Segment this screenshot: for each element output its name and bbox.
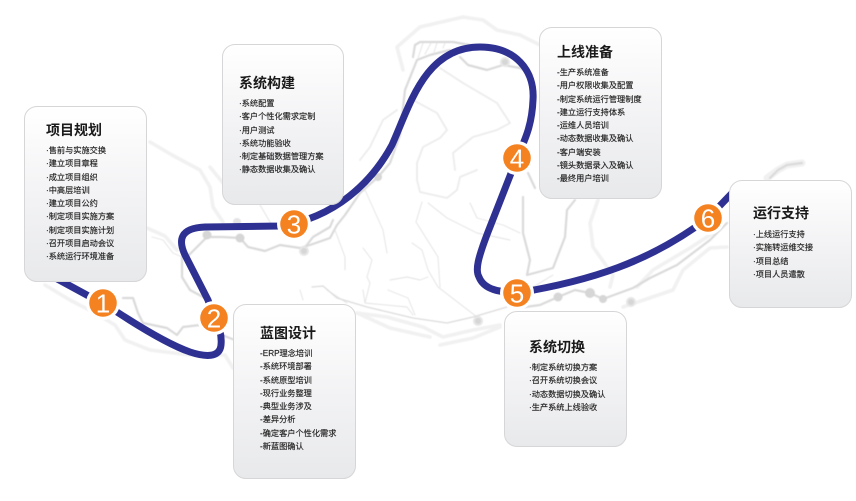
badge 5 (500, 276, 534, 310)
background river map (45, 17, 802, 368)
badge 3 (277, 207, 311, 241)
task list: -运维人员培训 (557, 121, 609, 130)
heading: 上线准备 (557, 44, 613, 60)
task list: ·制定基础数据管理方案 (239, 152, 324, 161)
panel: 上线准备 (539, 27, 662, 199)
panel: 运行支持 (729, 180, 852, 308)
task list (529, 362, 606, 412)
task list: ·中高层培训 (46, 186, 90, 195)
task list: -用户权限收集及配置 (557, 81, 633, 90)
badge 5: 5 (510, 278, 524, 308)
task list: ·上线运行支持 (753, 230, 805, 239)
panel: 系统构建 (222, 44, 344, 205)
heading: 运行支持 (753, 205, 809, 221)
task list: ·制定系统切换方案 (529, 363, 597, 372)
task list: ·项目人员遣散 (753, 270, 805, 279)
task list: ·静态数据收集及确认 (239, 165, 315, 174)
task list: ·召开项目启动会议 (46, 239, 114, 248)
task list: ·系统功能验收 (239, 139, 291, 148)
panel: 蓝图设计 (233, 304, 356, 479)
task list: ·成立项目组织 (46, 173, 98, 182)
task list: ·用户测试 (239, 126, 274, 135)
task list: ·系统配置 (239, 99, 274, 108)
task list: ·售前与实施交换 (46, 146, 106, 155)
task list: ·制定项目实施方案 (46, 212, 114, 221)
task list: -最终用户培训 (557, 174, 609, 183)
task list: ·实施转运维交接 (753, 243, 813, 252)
route line (50, 47, 735, 355)
task list: -生产系统准备 (557, 68, 609, 77)
task list: ·生产系统上线验收 (529, 403, 597, 412)
task list: ·动态数据切换及确认 (529, 390, 605, 399)
heading: 项目规划 (46, 122, 102, 138)
task list (239, 99, 324, 174)
task list: -建立运行支持体系 (557, 108, 625, 117)
badge 1: 1 (96, 288, 110, 318)
task list (753, 230, 813, 279)
badge 3: 3 (287, 210, 301, 240)
task list: -客户端安装 (557, 148, 601, 157)
panel: 系统切换 (504, 311, 627, 447)
task list: -动态数据收集及确认 (557, 134, 633, 143)
task list: -ERP理念培训 (260, 349, 312, 358)
badge 4: 4 (510, 144, 524, 174)
badge 6 (691, 201, 725, 235)
heading: 系统切换 (529, 339, 585, 355)
task list: -镜头数据录入及确认 (557, 161, 633, 170)
badge 4 (500, 141, 534, 175)
task list: -差异分析 (260, 415, 295, 424)
task list: ·项目总结 (753, 257, 788, 266)
task list: ·召开系统切换会议 (529, 376, 597, 385)
task list (260, 348, 336, 451)
panel: 项目规划 (24, 106, 147, 282)
badge 2 (197, 301, 231, 335)
task list: ·建立项目公约 (46, 199, 98, 208)
heading: 系统构建 (239, 75, 295, 91)
task list (46, 146, 114, 261)
heading: 蓝图设计 (260, 325, 316, 341)
badge 1 (86, 286, 120, 320)
task list: -现行业务整理 (260, 389, 312, 398)
task list: -制定系统运行管理制度 (557, 95, 642, 104)
task list: ·客户个性化需求定制 (239, 112, 315, 121)
task list: ·建立项目章程 (46, 159, 98, 168)
task list: -系统环境部署 (260, 362, 312, 371)
task list: ·制定项目实施计划 (46, 226, 114, 235)
badge 2: 2 (207, 304, 221, 334)
task list (557, 68, 642, 183)
task list: -系统原型培训 (260, 376, 312, 385)
badge 6: 6 (701, 204, 715, 234)
task list: -确定客户个性化需求 (260, 429, 336, 438)
task list: ·系统运行环境准备 (46, 252, 114, 261)
task list: -典型业务涉及 (260, 402, 312, 411)
task list: -新蓝图确认 (260, 442, 304, 451)
